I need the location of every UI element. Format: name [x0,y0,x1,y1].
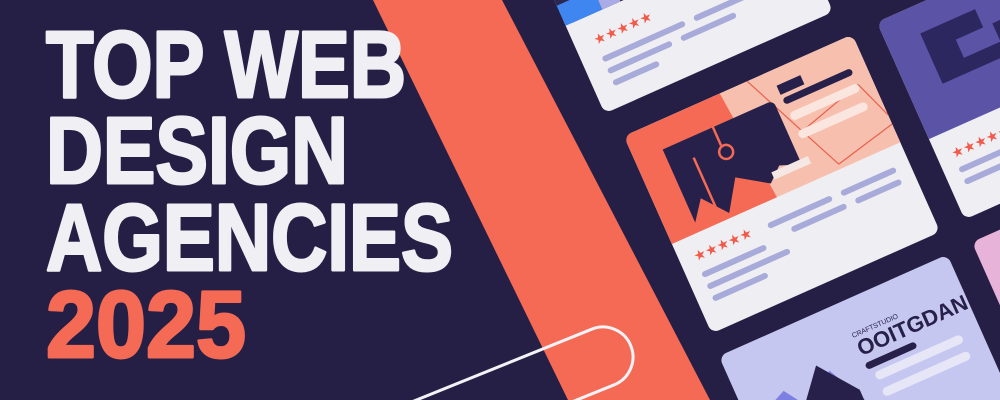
card pink (edge) [972,140,1000,400]
card bottom: lavender [719,254,1000,400]
title: AGENCIES [46,185,453,291]
title [46,12,453,378]
card main: orange illustration: ★★★★★ [691,225,755,265]
title: DESIGN [46,98,348,204]
card right: purple [877,0,1000,220]
card main: orange illustration [624,34,940,334]
card bottom: lavender: OOITGDAN [853,290,972,361]
decorative pill outline [295,318,642,400]
title: TOP WEB [46,12,406,118]
orange diagonal stripe [373,0,710,400]
card top (partially visible) [517,0,833,114]
card text: CRAFTSTUDIO [851,313,900,340]
dark illustration shape [663,100,808,227]
title: 2025 [46,272,246,378]
card top (partially visible): ★★★★★ [591,9,655,49]
